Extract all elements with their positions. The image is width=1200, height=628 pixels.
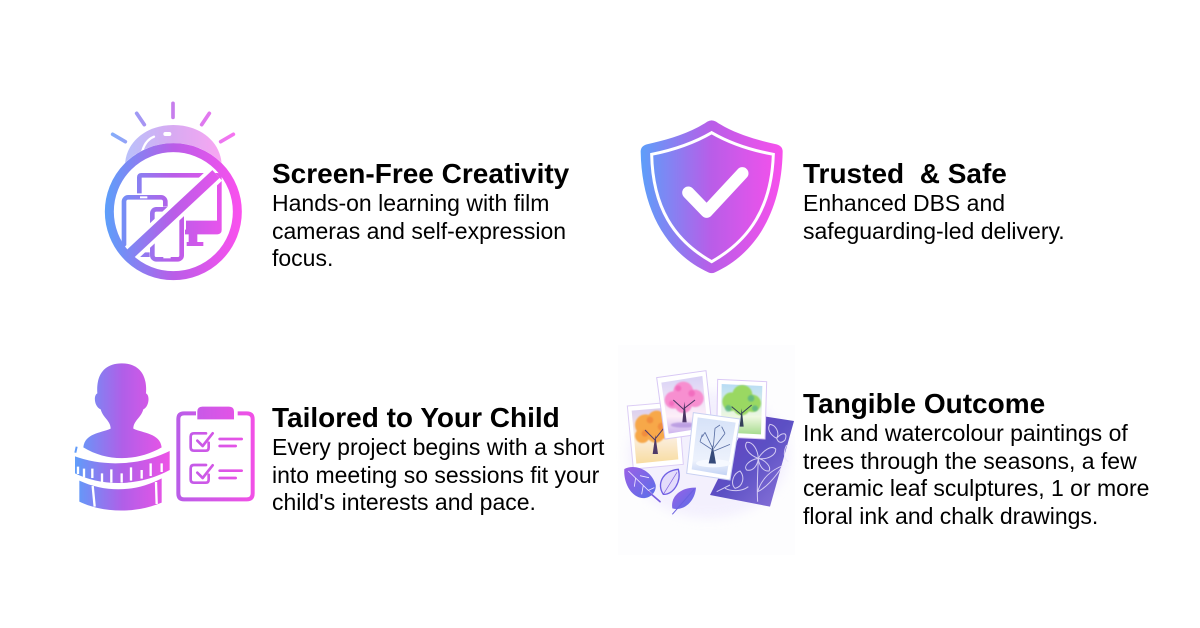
body text: Every project begins with a short [272, 434, 604, 460]
heading: Tailored to Your Child [272, 402, 560, 433]
body text: Ink and watercolour paintings of [803, 420, 1128, 446]
body text: Enhanced DBS and [803, 190, 1005, 216]
text: Tailored to Your Child [272, 402, 604, 515]
illustration: seasonal tree paintings, leaves and floral drawing [624, 370, 794, 516]
body text: ceramic leaf sculptures, 1 or more [803, 475, 1149, 501]
icon: child with tape measure and clipboard [74, 363, 255, 510]
body text: trees through the seasons, a few [803, 448, 1137, 474]
body text: child's interests and pace. [272, 489, 536, 515]
soft lavender glow [628, 392, 788, 518]
summer tree painting [717, 379, 767, 439]
body text: Hands-on learning with film [272, 190, 549, 216]
body text [803, 190, 1065, 244]
spring tree painting [657, 371, 713, 439]
body text: focus. [272, 245, 333, 271]
heading: Trusted & Safe [803, 158, 1007, 189]
heading: Screen-Free Creativity [272, 158, 569, 189]
body text: safeguarding-led delivery. [803, 218, 1065, 244]
body text: floral ink and chalk drawings. [803, 502, 1098, 528]
text: Trusted & Safe [803, 158, 1065, 244]
body text [272, 434, 604, 515]
icon: no screens with sun [104, 102, 242, 280]
autumn tree painting [627, 402, 683, 469]
text: Tangible Outcome [803, 388, 1149, 529]
winter tree painting [687, 413, 740, 480]
heading: Tangible Outcome [803, 388, 1045, 419]
body text [803, 420, 1149, 529]
floral ink and chalk drawing [710, 416, 794, 507]
text: Screen-Free Creativity [272, 158, 569, 271]
body text: into meeting so sessions fit your [272, 462, 599, 488]
ceramic leaves [624, 467, 696, 514]
body text: cameras and self-expression [272, 218, 566, 244]
body text [272, 190, 566, 271]
icon: shield with check [640, 120, 783, 274]
